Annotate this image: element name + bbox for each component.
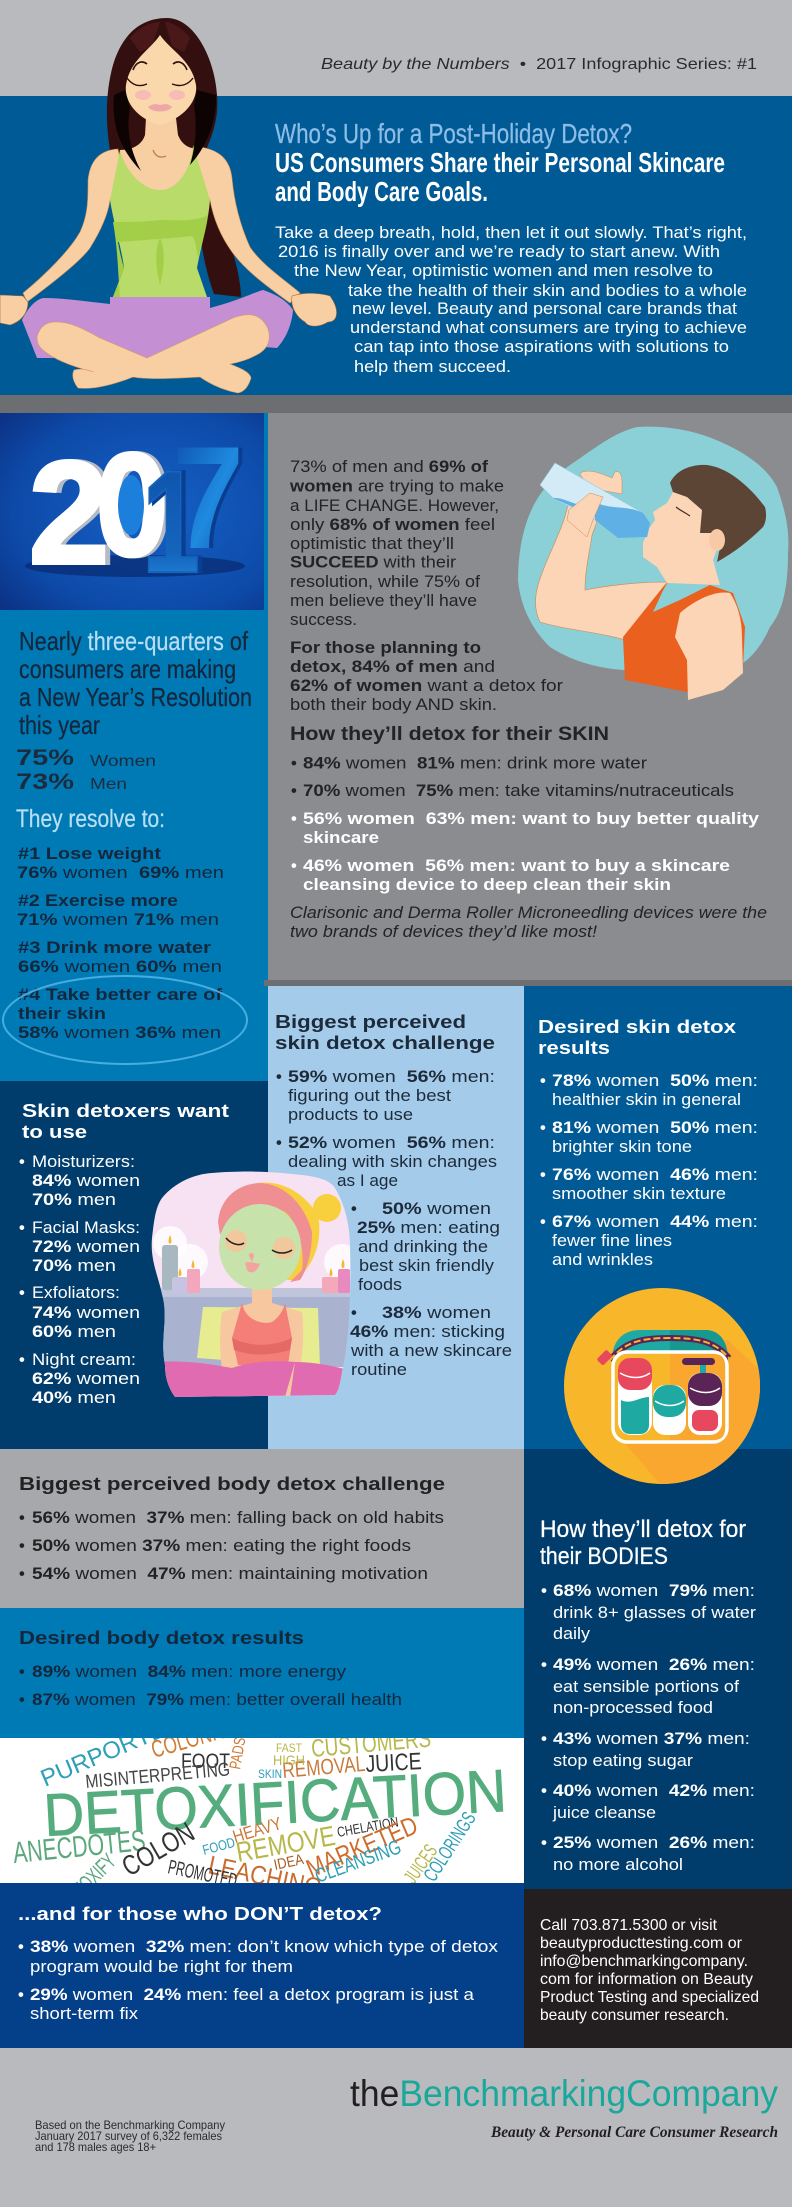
panel: contact: com for information on Beauty: [540, 1971, 753, 1988]
list: body detox methods: •: [541, 1655, 547, 1674]
intro paragraph: [275, 223, 747, 376]
list: results: 67% women 44% men:: [552, 1213, 758, 1231]
list: products: Night cream:: [32, 1351, 136, 1369]
list: body detox methods: 40% women 42% men:: [553, 1781, 755, 1800]
list: products: 70% men: [32, 1257, 116, 1275]
panel: biggest perceived body detox challenge: [0, 1449, 524, 1608]
panel: contact: Product Testing and specialized: [540, 1989, 759, 2006]
list: reasons: [18, 1938, 499, 2023]
list: results: fewer fine lines: [552, 1232, 672, 1250]
heading: [540, 1516, 746, 1570]
list: products: [19, 1153, 140, 1407]
list: reasons: program would be right for them: [30, 1958, 293, 1976]
panel: detoxification word cloud: FOOT: [181, 1750, 230, 1773]
list: reasons: •: [18, 1938, 24, 1956]
text: life change paragraph: resolution, while 75% of: [290, 572, 480, 591]
list: challenges: 38% women: [382, 1304, 491, 1322]
list: body detox methods: eat sensible portions of: [553, 1677, 739, 1696]
list: challenges: •: [351, 1304, 357, 1322]
list: challenges: as I age: [337, 1172, 398, 1190]
list: products: 70% men: [32, 1191, 116, 1209]
stat: women and men: 75%: [16, 745, 74, 770]
heading: nearly three-quarters: [19, 626, 252, 740]
list: reasons: short-term fix: [30, 2005, 139, 2023]
text: life change paragraph: SUCCEED with their: [290, 552, 456, 572]
panel: detoxification word cloud: IDEA: [272, 1851, 305, 1874]
note: device brands: two brands of devices they’d like most!: [290, 922, 597, 941]
intro paragraph: Take a deep breath, hold, then let it out slowly. That’s right,: [275, 223, 747, 242]
list: resolutions: 71% women 71% men: [17, 911, 219, 929]
survey note: January 2017 survey of 6,322 females: [35, 2129, 222, 2143]
panel: those who don't detox: [0, 1883, 524, 2048]
list: resolutions: #2 Exercise more: [18, 892, 178, 910]
list: skin detox methods: •: [291, 782, 297, 800]
list: results: •: [540, 1072, 546, 1090]
heading: ...and for those who DON’T detox?: [18, 1904, 382, 1924]
neck and head: [643, 492, 723, 585]
list: products: Facial Masks:: [32, 1219, 140, 1237]
list: challenges: and drinking the: [358, 1238, 488, 1256]
list: body results: •: [19, 1691, 25, 1709]
list: challenges: foods: [358, 1276, 402, 1294]
intro paragraph: can tap into those aspirations with solutions to: [354, 337, 729, 356]
text: detox for body and skin: both their body AND skin.: [290, 695, 497, 714]
panel: detoxification word cloud: HIGH: [273, 1752, 305, 1768]
list: results: brighter skin tone: [552, 1138, 692, 1156]
illustration: woman with face mask: [150, 1170, 360, 1400]
panel: detoxification word cloud: CHELATION: [336, 1813, 400, 1840]
panel: detoxification word cloud: FAST: [276, 1741, 303, 1755]
heading: their BODIES: [540, 1543, 668, 1570]
list: results: [540, 1072, 758, 1269]
heading: How they’ll detox for: [540, 1516, 746, 1543]
panel: contact: beauty consumer research.: [540, 2007, 729, 2024]
panel: detoxification word cloud: LEACHING: [206, 1850, 324, 1903]
list: challenges: •: [276, 1068, 282, 1086]
text: detox for body and skin: detox, 84% of men and: [290, 657, 495, 676]
panel: 2017 resolutions column: [0, 413, 268, 1081]
list: challenges: 52% women 56% men:: [288, 1134, 495, 1152]
survey note: and 178 males ages 18+: [35, 2140, 156, 2154]
list: body detox methods: •: [541, 1833, 547, 1852]
subheading: they resolve to: They resolve to:: [16, 805, 165, 833]
list: skin detox methods: 84% women 81% men: drink more water: [303, 754, 648, 772]
text: life change paragraph: only 68% of women feel: [290, 515, 495, 534]
heading: nearly three-quarters: consumers are making: [19, 654, 236, 684]
list: challenges: 46% men: sticking: [350, 1323, 505, 1341]
icon: cosmetics travel bag: [564, 1288, 770, 1490]
heading: results: [538, 1038, 610, 1058]
heading: Desired skin detox: [538, 1017, 736, 1037]
list: resolutions: 76% women 69% men: [17, 864, 224, 882]
list: challenges: best skin friendly: [359, 1257, 495, 1275]
list: resolutions: [17, 845, 224, 1042]
list: reasons: 29% women 24% men: feel a detox program is just a: [30, 1986, 475, 2004]
list: skin detox methods: •: [291, 754, 297, 772]
list: skin detox methods: skincare: [303, 829, 379, 847]
list: products: •: [19, 1219, 25, 1237]
heading: nearly three-quarters: a New Year’s Resolution: [19, 682, 252, 712]
text: life change paragraph: optimistic that they’ll: [290, 534, 454, 553]
list: body challenges: 54% women 47% men: maintaining motivation: [32, 1565, 428, 1583]
list: products: 62% women: [32, 1370, 140, 1388]
text: detox for body and skin: 62% of women want a detox for: [290, 676, 563, 695]
survey note: Based on the Benchmarking Company: [35, 2118, 225, 2132]
title: Who’s Up for a Post-Holiday Detox?: [275, 118, 632, 149]
panel: detoxification word cloud: REMOVE: [234, 1820, 338, 1868]
panel: contact: Call 703.871.5300 or visit: [540, 1917, 718, 1934]
list: resolutions: their skin: [18, 1005, 106, 1023]
list: results: and wrinkles: [552, 1251, 653, 1269]
title: [275, 118, 725, 207]
list: body detox methods: daily: [553, 1624, 591, 1643]
image: 3D 2017: 2: [29, 431, 109, 594]
list: body detox methods: 25% women 26% men:: [553, 1833, 755, 1852]
panel: how they'll detox for their bodies: [524, 1449, 792, 1889]
intro paragraph: 2016 is finally over and we’re ready to start anew. With: [278, 242, 720, 261]
image: 3D 2017: 0: [96, 423, 168, 586]
panel: detoxification word cloud: PROMOTED: [166, 1856, 239, 1892]
panel: detoxification word cloud: JUICES: [400, 1841, 442, 1888]
note: device brands: [290, 903, 767, 941]
list: body detox methods: 43% women 37% men:: [553, 1729, 750, 1748]
text: life change paragraph: success.: [290, 610, 357, 629]
list: body results: 87% women 79% men: better overall health: [32, 1691, 402, 1709]
list: skin detox methods: •: [291, 810, 297, 828]
panel: contact: info@benchmarkingcompany.: [540, 1953, 748, 1970]
tagline: Beauty & Personal Care Consumer Research: [490, 2124, 778, 2141]
list: body challenges: [19, 1509, 444, 1583]
image: 3D 2017: 0: [100, 423, 172, 586]
logo: the Benchmarking Company: theBenchmarkingCompany: [350, 2073, 778, 2114]
list: products: •: [19, 1284, 25, 1302]
list: body results: [19, 1663, 402, 1709]
list: skin detox methods: 56% women 63% men: want to buy better quality: [303, 810, 760, 828]
panel: detoxification word cloud: COLORINGS: [420, 1808, 481, 1886]
list: body detox methods: •: [541, 1729, 547, 1748]
text: life change paragraph: men believe they’ll have: [290, 591, 477, 610]
list: body detox methods: non-processed food: [553, 1698, 713, 1717]
panel: intro: [0, 96, 792, 395]
panel: contact: [524, 1889, 792, 2048]
text: life change paragraph: a LIFE CHANGE. However,: [290, 496, 499, 515]
survey note: [35, 2118, 225, 2154]
heading: Biggest perceived: [275, 1012, 466, 1032]
list: body challenges: •: [19, 1537, 25, 1555]
list: challenges: [276, 1068, 512, 1379]
panel: detoxification word cloud: CLEANSING: [312, 1836, 404, 1888]
stat: women and men: [16, 745, 156, 794]
image: 3D 2017: 7: [176, 416, 248, 579]
list: body results: •: [19, 1663, 25, 1681]
text: detox for body and skin: For those planning to: [290, 638, 481, 657]
series label: Beauty by the Numbers • 2017 Infographic Series: #1: [321, 56, 757, 73]
panel: contact: beautyproducttesting.com or: [540, 1935, 743, 1952]
list: products: 40% men: [32, 1389, 116, 1407]
panel: header band: [0, 0, 792, 96]
list: resolutions: #4 Take better care of: [18, 986, 223, 1004]
panel: detoxification word cloud: PADS: [227, 1736, 249, 1771]
panel: detoxification word cloud: HEAVY: [230, 1813, 284, 1847]
heading: [538, 1017, 736, 1058]
text: detox for body and skin: [290, 638, 563, 714]
band: section divider: [0, 395, 792, 413]
panel: detoxification word cloud: ANECDOTES: [11, 1824, 147, 1870]
list: products: 60% men: [32, 1323, 116, 1341]
list: products: •: [19, 1153, 25, 1171]
intro paragraph: new level. Beauty and personal care brands that: [352, 299, 737, 318]
list: resolutions: 58% women 36% men: [18, 1024, 221, 1042]
panel: detoxification word cloud: TOXIFY: [68, 1848, 121, 1902]
list: results: •: [540, 1213, 546, 1231]
list: body detox methods: •: [541, 1781, 547, 1800]
list: reasons: •: [18, 1986, 24, 2004]
heading: Biggest perceived body detox challenge: [19, 1474, 445, 1494]
image: 3D 2017: [0, 413, 264, 610]
list: skin detox methods: 46% women 56% men: want to buy a skincare: [303, 857, 730, 875]
list: challenges: 50% women: [382, 1200, 491, 1218]
icon: meditating woman: [0, 18, 337, 393]
panel: skin detoxers want to use: [0, 1081, 268, 1449]
image: 3D 2017: 1: [142, 440, 200, 603]
intro paragraph: the New Year, optimistic women and men resolve to: [294, 261, 713, 280]
list: skin detox methods: 70% women 75% men: take vitamins/nutraceuticals: [303, 782, 734, 800]
heading: Desired body detox results: [19, 1628, 304, 1648]
heading: nearly three-quarters: Nearly three-quarters of: [19, 626, 249, 656]
list: products: 74% women: [32, 1304, 140, 1322]
stat: women and men: 73%: [16, 769, 74, 794]
panel: grey skin detox: [268, 413, 792, 980]
panel: detoxification word cloud: JUICE: [365, 1748, 422, 1778]
heading: Skin detoxers want: [22, 1101, 229, 1121]
list: challenges: with a new skincare: [350, 1342, 512, 1360]
panel: detoxification word cloud: SKIN: [258, 1767, 282, 1781]
list: body detox methods: juice cleanse: [552, 1803, 656, 1822]
list: products: Exfoliators:: [32, 1284, 120, 1302]
fingers behind bottle: [580, 471, 622, 494]
list: challenges: 25% men: eating: [357, 1219, 500, 1237]
heading: nearly three-quarters: this year: [19, 710, 100, 740]
list: challenges: •: [276, 1134, 282, 1152]
panel: desired skin detox results: [524, 986, 792, 1449]
panel: detoxification word cloud: MARKETED: [302, 1810, 422, 1884]
list: body detox methods: drink 8+ glasses of water: [553, 1603, 756, 1622]
text: life change paragraph: women are trying to make: [289, 476, 504, 496]
heading: [22, 1101, 229, 1142]
arms: [23, 149, 122, 302]
list: challenges: routine: [351, 1361, 407, 1379]
list: body results: 89% women 84% men: more energy: [32, 1663, 347, 1681]
list: results: 78% women 50% men:: [552, 1072, 758, 1090]
image: 3D 2017: 2: [34, 431, 114, 594]
list: products: Moisturizers:: [32, 1153, 135, 1171]
list: results: 81% women 50% men:: [552, 1119, 758, 1137]
list: body detox methods: no more alcohol: [553, 1855, 683, 1874]
note: device brands: Clarisonic and Derma Roller Microneedling devices were the: [290, 903, 767, 922]
list: results: healthier skin in general: [552, 1091, 741, 1109]
band: divider above challenge panels: [264, 980, 792, 986]
heading: how they'll detox for their skin: How they’ll detox for their SKIN: [290, 724, 609, 745]
panel: footer: [0, 2048, 792, 2207]
panel: detoxification word cloud: DETOXIFICATION: [42, 1757, 508, 1849]
heading: to use: [22, 1122, 87, 1142]
text: life change paragraph: [289, 457, 504, 629]
list: results: smoother skin texture: [552, 1185, 726, 1203]
image: 3D 2017: 1: [146, 440, 204, 603]
list: challenges: products to use: [288, 1106, 413, 1124]
list: body challenges: 56% women 37% men: falling back on old habits: [32, 1509, 444, 1527]
list: resolutions: #3 Drink more water: [18, 939, 212, 957]
list: challenges: dealing with skin changes: [288, 1153, 497, 1171]
heading: skin detox challenge: [275, 1033, 495, 1053]
list: products: 72% women: [32, 1238, 140, 1256]
list: products: •: [19, 1351, 25, 1369]
list: products: 84% women: [32, 1172, 140, 1190]
list: skin detox methods: •: [291, 857, 297, 875]
list: results: 76% women 46% men:: [552, 1166, 758, 1184]
list: resolutions: 66% women 60% men: [18, 958, 222, 976]
title: and Body Care Goals.: [275, 176, 488, 207]
list: resolutions: #1 Lose weight: [18, 845, 162, 863]
list: body detox methods: [541, 1581, 756, 1874]
list: challenges: •: [351, 1200, 357, 1218]
list: body detox methods: 49% women 26% men:: [553, 1655, 755, 1674]
list: results: •: [540, 1166, 546, 1184]
panel: detoxification word cloud: PURPORTED: [37, 1709, 185, 1793]
panel: detoxification word cloud: FOOD: [201, 1834, 237, 1858]
panel: biggest perceived skin detox challenge: [268, 986, 524, 1449]
stat: women and men: Women: [90, 753, 156, 770]
list: body detox methods: 68% women 79% men:: [553, 1581, 755, 1600]
intro paragraph: help them succeed.: [354, 357, 511, 376]
panel: detoxification word cloud: REMOVAL: [281, 1751, 366, 1783]
list: results: •: [540, 1119, 546, 1137]
list: challenges: 59% women 56% men:: [288, 1068, 495, 1086]
raised arm: [536, 500, 668, 640]
illustration: man drinking water: [518, 427, 788, 700]
list: skin detox methods: cleansing device to deep clean their skin: [303, 876, 671, 894]
panel: detoxification word cloud: MISINTERPRETING: [85, 1759, 231, 1793]
list: body challenges: 50% women 37% men: eating the right foods: [32, 1537, 411, 1555]
intro paragraph: understand what consumers are trying to achieve: [350, 318, 747, 337]
panel: detoxification word cloud: COLON: [116, 1816, 200, 1882]
heading: [275, 1012, 495, 1053]
panel: desired body detox results: [0, 1608, 524, 1738]
panel: detoxification word cloud: CUSTOMERS: [310, 1725, 432, 1763]
list: body detox methods: stop eating sugar: [553, 1751, 693, 1770]
list: body challenges: •: [19, 1565, 25, 1583]
intro paragraph: take the health of their skin and bodies to a whole: [348, 281, 747, 300]
list: body detox methods: •: [541, 1581, 547, 1600]
text: life change paragraph: 73% of men and 69% of: [290, 457, 488, 476]
list: body challenges: •: [19, 1509, 25, 1527]
panel: detoxification word cloud: [0, 1738, 524, 1883]
list: reasons: 38% women 32% men: don’t know which type of detox: [30, 1938, 499, 1956]
stat: women and men: Men: [90, 776, 127, 793]
image: 3D 2017: 7: [172, 416, 244, 579]
list: challenges: figuring out the best: [288, 1087, 451, 1105]
list: skin detox methods: [291, 754, 760, 894]
highlight: hand-drawn ellipse: [3, 976, 247, 1064]
panel: detoxification word cloud: COLONICS: [148, 1713, 242, 1764]
